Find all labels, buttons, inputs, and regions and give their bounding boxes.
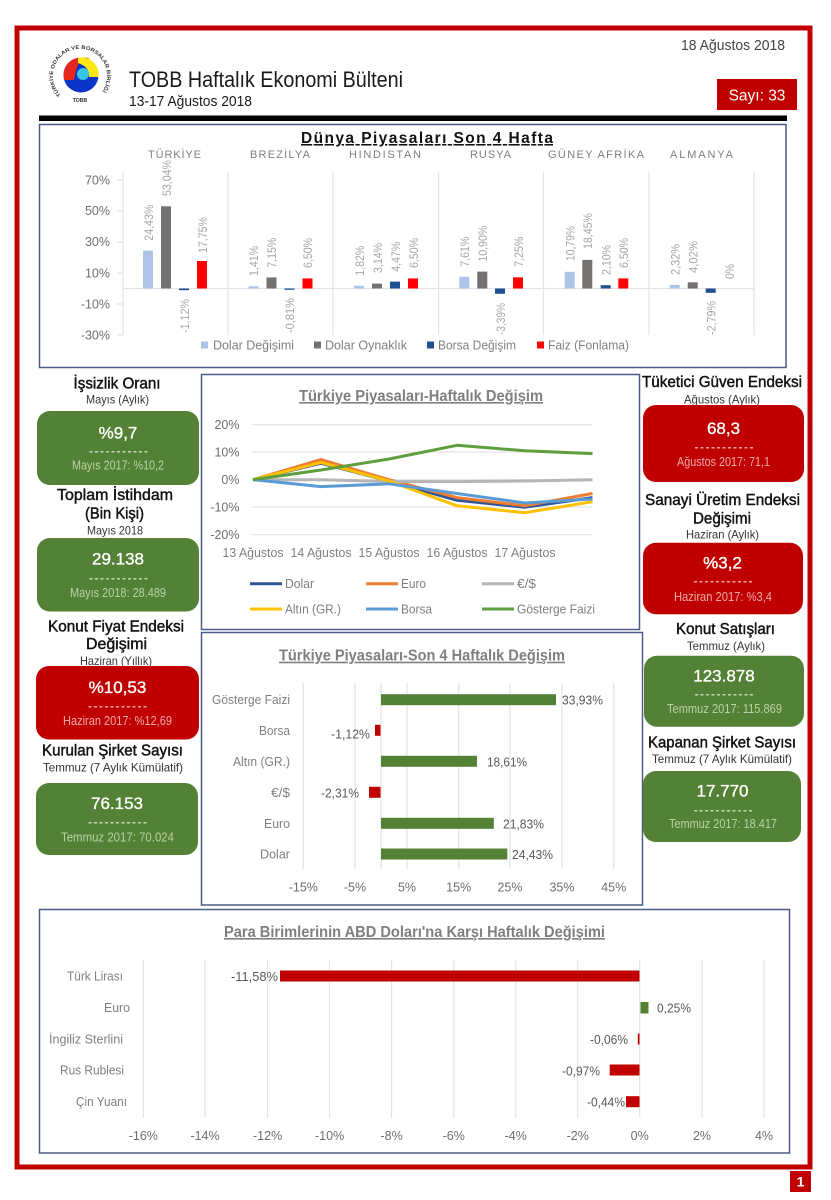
legend: Dolar Oynaklık xyxy=(325,338,407,352)
rotated data labels: 2,10% xyxy=(600,245,614,275)
rotated data labels: 3,14% xyxy=(371,243,385,273)
panel: industrial production: Değişimi xyxy=(693,511,751,528)
value labels: 0,25% xyxy=(657,1000,691,1016)
rotated data labels: 6,50% xyxy=(301,238,315,268)
x axis labels xyxy=(222,545,556,560)
y axis labels: 10% xyxy=(85,266,110,280)
x axis labels: 45% xyxy=(601,880,626,894)
category labels: Rus Rublesi xyxy=(60,1062,124,1078)
x axis labels: 14 Ağustos xyxy=(290,545,352,560)
y axis labels: 70% xyxy=(85,174,110,188)
header rule xyxy=(39,116,787,121)
rotated data labels: 4,02% xyxy=(686,241,700,273)
rotated data labels: -0,81% xyxy=(283,298,297,333)
country labels xyxy=(148,148,734,161)
x axis labels: -12% xyxy=(253,1129,282,1143)
title: TOBB Haftalık Ekonomi Bülteni xyxy=(129,67,403,92)
panel: unemployment: Mayıs (Aylık) xyxy=(86,393,149,407)
panel: house sales xyxy=(644,621,804,727)
panel: total employment: Mayıs 2018 xyxy=(87,524,143,538)
panel: house price index: %10,53 xyxy=(89,678,146,697)
rotated data labels: 1,41% xyxy=(247,246,261,276)
panel: house price index: Haziran (Yıllık) xyxy=(80,654,152,668)
panel: closed companies: Temmuz 2017: 18.417 xyxy=(669,816,777,831)
category labels: Türk Lirası xyxy=(67,968,123,984)
legend: Gösterge Faizi xyxy=(517,602,595,616)
panel: new companies: 76.153 xyxy=(91,794,143,813)
panel: industrial production: %3,2 xyxy=(703,554,742,573)
category labels: Altın (GR.) xyxy=(233,754,290,769)
panel: consumer confidence: Tüketici Güven Endeksi xyxy=(642,374,802,391)
panel: house price index: Haziran 2017: %12,69 xyxy=(63,713,172,728)
x axis labels: -4% xyxy=(505,1129,527,1143)
issue badge: Sayı: 33 xyxy=(729,88,785,104)
panel: new companies: ----------- xyxy=(88,815,147,829)
value labels: -0,44% xyxy=(587,1094,625,1110)
panel: weekly change line chart xyxy=(202,374,640,630)
panel: total employment: Mayıs 2018: 28.489 xyxy=(70,585,166,600)
legend: Borsa xyxy=(401,602,433,616)
line series xyxy=(253,445,592,513)
panel: house sales: Temmuz (Aylık) xyxy=(687,639,765,653)
x axis labels: -8% xyxy=(380,1129,403,1143)
panel: industrial production: Haziran 2017: %3,4 xyxy=(674,589,772,604)
y axis labels: 10% xyxy=(214,446,240,460)
grid lines xyxy=(252,425,592,535)
x axis labels: 16 Ağustos xyxy=(426,545,488,560)
panel: industrial production: Haziran (Aylık) xyxy=(686,528,759,542)
icon: TOBB logo: TOBB xyxy=(73,98,88,104)
legend: Borsa Değişim xyxy=(438,338,516,352)
panel: unemployment: ----------- xyxy=(89,444,148,458)
value labels: 24,43% xyxy=(512,847,553,862)
chart title: Türkiye Piyasaları-Son 4 Haftalık Değişim xyxy=(279,648,565,665)
category labels: Borsa xyxy=(259,723,291,738)
panel: industrial production: Sanayi Üretim Endeksi xyxy=(645,491,800,509)
panel: total employment xyxy=(37,485,199,612)
icon: TOBB logo: TÜRKİYE ODALAR VE BORSALAR BİRLİĞİ xyxy=(48,45,112,98)
rotated data labels: 4,47% xyxy=(389,241,403,272)
y axis labels: -20% xyxy=(210,528,240,542)
panel: unemployment: İşsizlik Oranı xyxy=(74,374,160,393)
category labels xyxy=(212,692,291,862)
panel: 4 week change bar chart xyxy=(202,632,642,905)
panel: total employment: ----------- xyxy=(89,571,148,585)
rotated data labels: 18,45% xyxy=(581,213,595,249)
grid separators xyxy=(117,172,754,335)
category labels: Euro xyxy=(104,1000,130,1015)
panel: total employment: Toplam İstihdam xyxy=(57,485,173,504)
rotated data labels: 24,43% xyxy=(142,204,156,241)
x axis labels: -15% xyxy=(289,880,318,894)
panel: new companies xyxy=(36,743,198,855)
grid lines xyxy=(303,683,614,869)
rotated data labels: 10,79% xyxy=(564,226,578,261)
category labels: €/$ xyxy=(271,785,291,800)
legend xyxy=(201,338,629,352)
x axis labels: -2% xyxy=(567,1129,589,1143)
rotated data labels: 2,32% xyxy=(668,244,682,275)
x axis labels: 15% xyxy=(446,880,471,894)
bars xyxy=(369,694,556,860)
category labels: Dolar xyxy=(260,846,291,862)
country labels: ALMANYA xyxy=(670,149,734,161)
y axis labels: 0% xyxy=(221,473,240,487)
panel: unemployment: %9,7 xyxy=(99,424,137,443)
panel: closed companies: 17.770 xyxy=(696,782,748,801)
value labels: -1,12% xyxy=(331,726,370,742)
value labels: 33,93% xyxy=(562,693,603,708)
bars xyxy=(280,970,648,1107)
value labels: -11,58% xyxy=(231,969,278,984)
x axis labels: -16% xyxy=(129,1129,158,1143)
heading: world markets: Dünya Piyasaları Son 4 Hafta xyxy=(301,130,553,147)
panel: house sales: Temmuz 2017: 115.869 xyxy=(667,701,782,716)
subtitle: date range: 13-17 Ağustos 2018 xyxy=(129,93,252,110)
country labels: RUSYA xyxy=(470,149,512,161)
y axis labels xyxy=(210,418,240,542)
rotated data labels: 6,50% xyxy=(407,238,421,268)
bars: faiz xyxy=(197,261,628,288)
legend xyxy=(250,576,595,616)
page number: 1 xyxy=(797,1174,805,1190)
chart title: Türkiye Piyasaları-Haftalık Değişim xyxy=(299,388,543,405)
panel: house price index: ----------- xyxy=(88,699,147,713)
y axis labels: 20% xyxy=(214,418,240,432)
bars: dolar değişimi xyxy=(143,251,680,288)
legend: Dolar Değişimi xyxy=(213,338,294,352)
country labels: GÜNEY AFRİKA xyxy=(548,148,645,161)
panel: closed companies: Temmuz (7 Aylık Kümülatif) xyxy=(652,752,792,766)
panel: new companies: Temmuz 2017: 70.024 xyxy=(61,830,174,845)
legend: Faiz (Fonlama) xyxy=(548,338,629,352)
country labels: HINDISTAN xyxy=(349,149,421,161)
panel: consumer confidence: Ağustos 2017: 71,1 xyxy=(677,454,770,469)
value labels: -0,97% xyxy=(562,1064,600,1078)
panel: new companies: Kurulan Şirket Sayısı xyxy=(42,743,183,760)
issue badge xyxy=(717,79,797,110)
x axis labels: -6% xyxy=(443,1129,465,1143)
x axis labels: 2% xyxy=(693,1129,711,1143)
panel: consumer confidence: ----------- xyxy=(694,440,754,454)
panel: total employment: (Bin Kişi) xyxy=(85,506,144,523)
panel: house sales: Konut Satışları xyxy=(676,621,775,638)
category labels: Çin Yuanı xyxy=(76,1094,127,1109)
panel: industrial production xyxy=(643,491,803,614)
y axis labels: -10% xyxy=(81,298,110,312)
country labels: TÜRKİYE xyxy=(148,148,201,161)
rotated data labels: 7,61% xyxy=(458,236,472,267)
panel: house sales: 123.878 xyxy=(693,667,755,686)
rotated data labels: 7,25% xyxy=(512,236,526,267)
rotated data labels: 6,50% xyxy=(617,238,631,268)
country labels: BREZİLYA xyxy=(250,148,311,161)
legend: Euro xyxy=(401,576,426,591)
rotated data labels xyxy=(142,160,737,335)
x axis labels xyxy=(129,1129,773,1143)
panel: house sales: ----------- xyxy=(694,687,754,701)
x axis labels: -5% xyxy=(344,880,366,894)
legend: €/$ xyxy=(517,576,537,591)
category labels: Euro xyxy=(264,816,290,831)
panel: closed companies: ----------- xyxy=(694,803,752,817)
category labels xyxy=(49,968,130,1109)
panel: closed companies xyxy=(643,735,801,842)
rotated data labels: 10,90% xyxy=(476,225,490,262)
x axis labels: 5% xyxy=(398,880,416,894)
rotated data labels: -1,12% xyxy=(178,299,192,333)
value labels: -2,31% xyxy=(321,785,359,800)
panel: consumer confidence: Ağustos (Aylık) xyxy=(684,393,760,407)
panel: unemployment xyxy=(37,374,199,485)
panel: house price index: Değişimi xyxy=(86,636,147,653)
panel: consumer confidence: 68,3 xyxy=(707,419,740,438)
panel: total employment: 29.138 xyxy=(92,550,144,569)
panel: unemployment: Mayıs 2017: %10,2 xyxy=(72,458,164,473)
rotated data labels: 7,15% xyxy=(265,237,279,268)
x axis labels: 15 Ağustos xyxy=(358,545,420,560)
x axis labels: 25% xyxy=(497,880,523,894)
rotated data labels: -2,79% xyxy=(704,301,718,335)
value labels: 18,61% xyxy=(487,754,527,769)
x axis labels: -10% xyxy=(315,1129,344,1143)
panel: currencies against USD xyxy=(40,910,790,1153)
grid lines xyxy=(143,960,764,1118)
chart title: Para Birimlerinin ABD Doları'na Karşı Haftalık Değişimi xyxy=(224,924,605,941)
x axis labels: 13 Ağustos xyxy=(222,545,284,560)
legend: Altın (GR.) xyxy=(285,602,341,616)
value labels: -0,06% xyxy=(590,1032,628,1047)
bars: borsa değişim xyxy=(179,282,716,294)
x axis labels: 35% xyxy=(549,880,575,894)
panel: new companies: Temmuz (7 Aylık Kümülatif) xyxy=(43,761,183,775)
x axis labels: 17 Ağustos xyxy=(494,545,556,560)
x axis labels: -14% xyxy=(190,1129,220,1143)
y axis labels: 50% xyxy=(85,204,110,218)
panel: consumer confidence xyxy=(642,374,804,482)
category labels: Gösterge Faizi xyxy=(212,692,290,707)
y axis labels: -30% xyxy=(81,328,110,342)
rotated data labels: 1,82% xyxy=(353,245,367,276)
panel: world markets xyxy=(40,124,786,368)
y axis labels: 30% xyxy=(85,235,110,249)
page number xyxy=(790,1171,811,1192)
y axis labels xyxy=(81,174,110,342)
panel: closed companies: Kapanan Şirket Sayısı xyxy=(648,735,796,752)
value labels xyxy=(231,969,691,1110)
y axis labels: -10% xyxy=(210,500,240,514)
rotated data labels: 53,04% xyxy=(160,160,174,196)
panel: house price index xyxy=(36,619,199,740)
date: 18 Ağustos 2018 xyxy=(681,37,785,54)
rotated data labels: 17,75% xyxy=(196,217,210,253)
bars: dolar oynaklık xyxy=(161,206,698,288)
value labels: 21,83% xyxy=(503,816,544,831)
rotated data labels: 0% xyxy=(723,264,737,279)
x axis labels: 4% xyxy=(755,1129,773,1143)
panel: industrial production: ----------- xyxy=(694,574,752,588)
x axis labels xyxy=(289,880,626,894)
value labels xyxy=(321,693,603,862)
legend: Dolar xyxy=(285,576,315,591)
panel: house price index: Konut Fiyat Endeksi xyxy=(48,619,184,636)
x axis labels: 0% xyxy=(631,1129,649,1143)
rotated data labels: -3,39% xyxy=(494,303,508,335)
category labels: İngiliz Sterlini xyxy=(49,1032,123,1046)
